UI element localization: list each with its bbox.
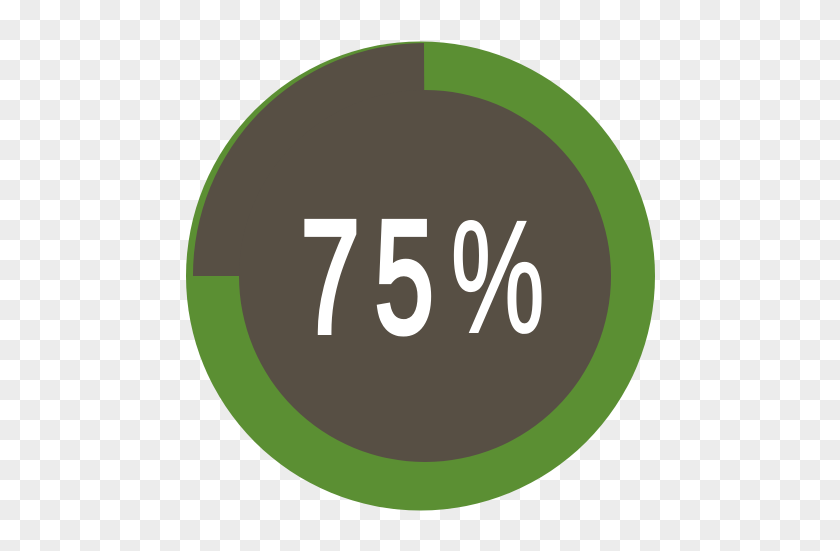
percentage label: % [451, 187, 545, 366]
percentage label: 75 [301, 187, 434, 366]
green progress ring [186, 42, 655, 510]
chart: 75% progress donut [186, 42, 655, 510]
inner brown disc [239, 90, 611, 462]
remaining quarter sector [193, 43, 425, 276]
